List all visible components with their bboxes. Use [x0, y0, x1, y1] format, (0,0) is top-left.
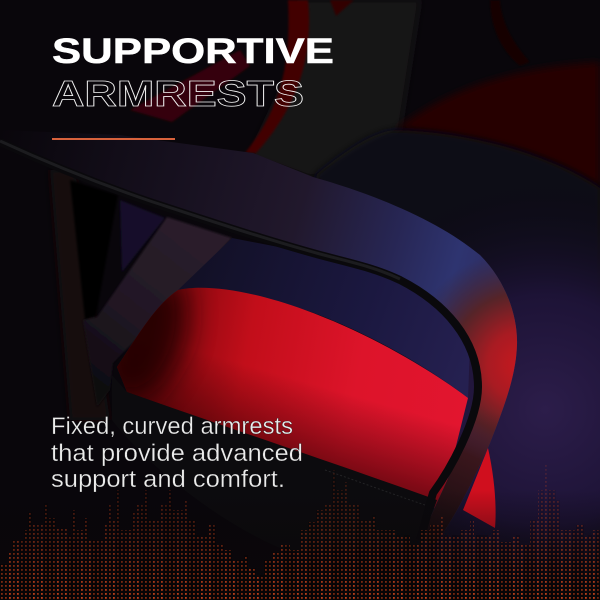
- description line 2: that provide advanced: [51, 440, 303, 467]
- background: purple glow right: [320, 180, 600, 600]
- halftone dots: [0, 460, 600, 600]
- seat base: [117, 288, 468, 508]
- seat stitching: [325, 470, 425, 505]
- title line: armrests outlined: ARMRESTS: [52, 73, 304, 114]
- band red reflection: [436, 263, 518, 449]
- red seat cushion: [117, 288, 468, 508]
- background: upper dark mauve chair area: [250, 0, 420, 178]
- title: [52, 32, 334, 114]
- background: red stripes top: [130, 0, 530, 153]
- bottom shade: [0, 490, 600, 600]
- description line 1: Fixed, curved armrests: [51, 413, 293, 440]
- seat left shadow: [100, 280, 188, 400]
- navy backrest: [178, 238, 470, 398]
- red patch top: [330, 0, 354, 16]
- black seat edge: [112, 375, 437, 552]
- piping highlight: [0, 141, 400, 279]
- band lower shade: [424, 426, 494, 545]
- background: dark navy seat area: [313, 130, 600, 600]
- description line 3: support and comfort.: [51, 466, 285, 493]
- red curved strip: [245, 0, 309, 153]
- halftone column variation: [1, 490, 599, 599]
- piping body: [0, 142, 478, 540]
- black gap behind arm: [70, 180, 118, 320]
- seat lower shade: [124, 361, 459, 508]
- left far panel: [50, 170, 110, 420]
- armrest piping: [0, 141, 478, 540]
- armrest band: [61, 134, 518, 537]
- navy slice: [120, 200, 165, 272]
- description text: [51, 413, 303, 493]
- red strip top right: [490, 0, 530, 66]
- halftone sound bars: [0, 460, 600, 600]
- title line: supportive: SUPPORTIVE: [52, 32, 334, 71]
- band base: [61, 134, 517, 545]
- accent line: [52, 138, 175, 140]
- mauve backrest strip: [83, 217, 232, 407]
- red diagonal strip: [130, 50, 250, 122]
- background: upper right red cushion: [395, 62, 600, 188]
- red cushion right of frame: [463, 448, 496, 528]
